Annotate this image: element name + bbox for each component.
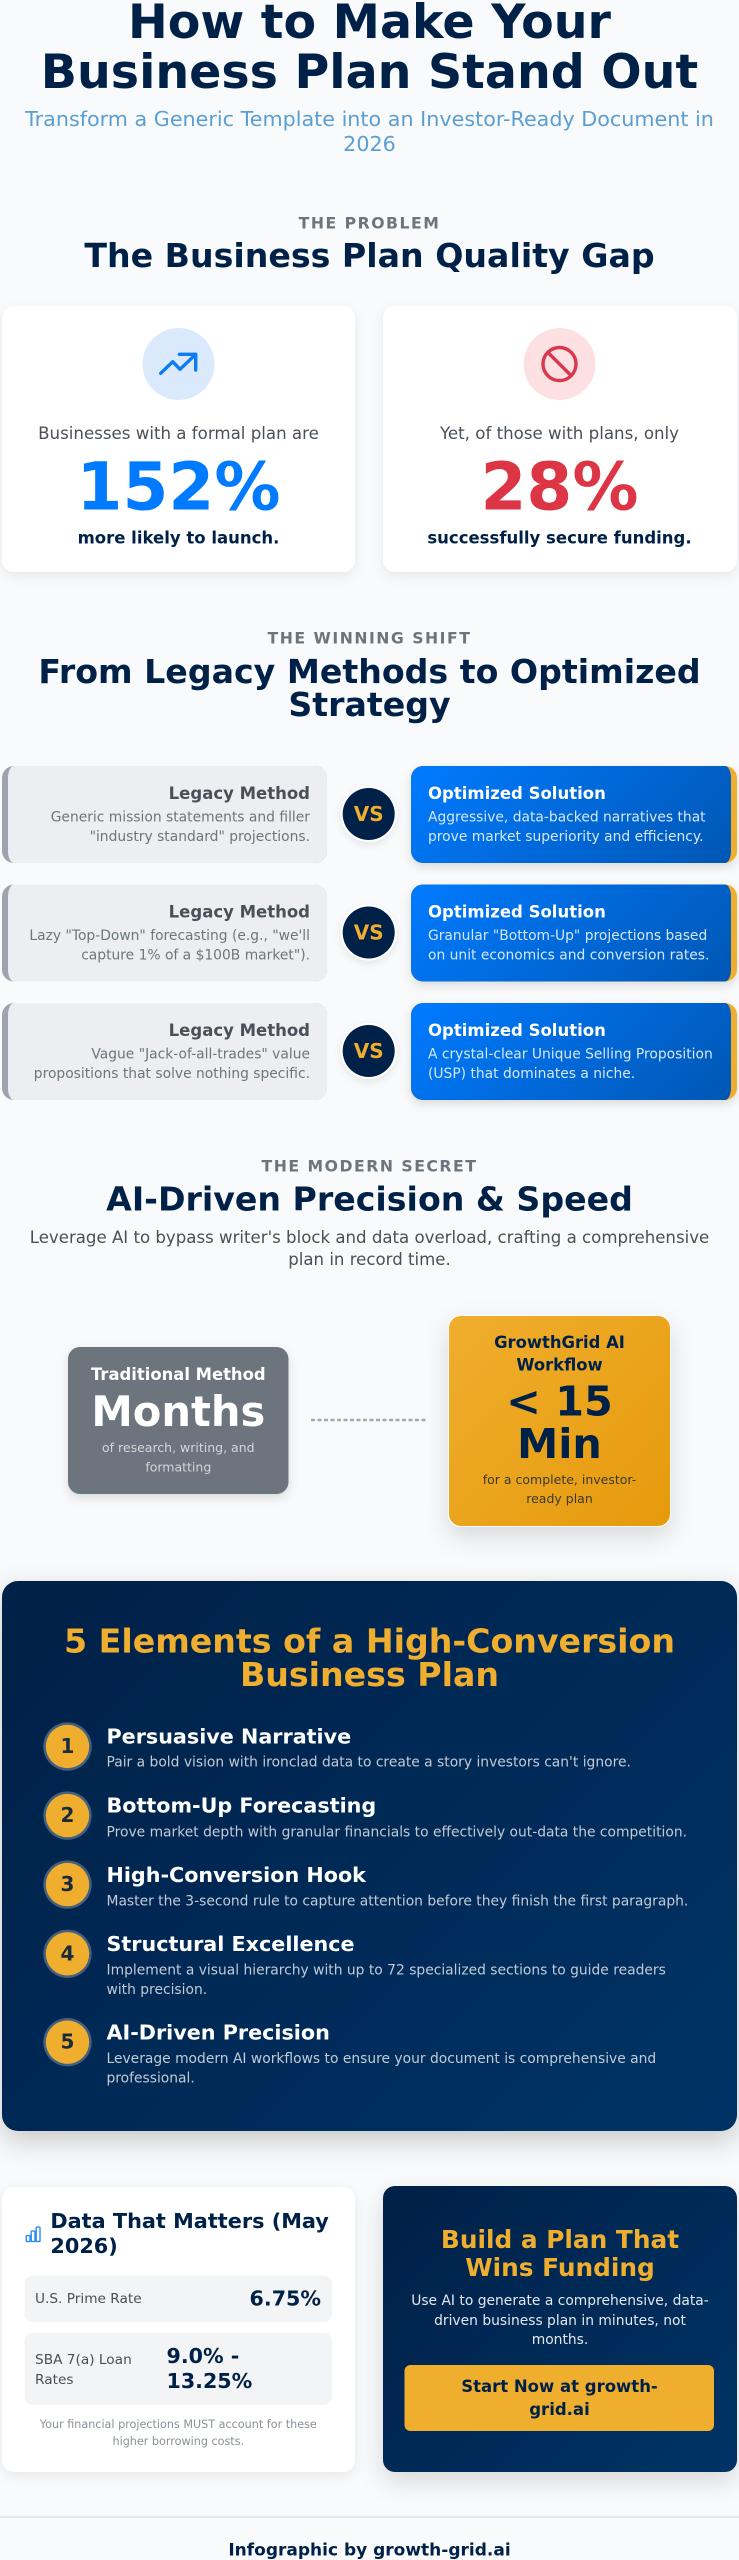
legacy card: Lazy "Top-Down" forecasting (e.g., "we'll: [29, 928, 310, 944]
vs badge: [341, 904, 397, 960]
panel: 5 elements: [2, 1581, 737, 2131]
vs badge: VS: [354, 920, 384, 944]
vs badge: [341, 1023, 397, 1079]
legacy card: Legacy Method: [169, 784, 310, 803]
panel: traditional method: Months: [91, 1387, 265, 1436]
vs badge: [341, 786, 397, 842]
element 3: High-Conversion Hook: [106, 1863, 367, 1887]
title line 2: Business Plan Stand Out: [41, 45, 698, 100]
stat number: 28%: [481, 448, 638, 526]
data row: sba rates: 9.0% -: [166, 2344, 239, 2368]
data row: sba rates: Rates: [35, 2372, 74, 2388]
cta button: Start Now at growth-: [461, 2377, 658, 2396]
data row: prime rate: 6.75%: [250, 2287, 321, 2311]
intro text: Leverage AI to bypass writer's block and data overload, crafting a comprehensive: [30, 1228, 709, 1247]
panel: traditional method: [68, 1347, 288, 1494]
element 2: Prove market depth with granular financials to effectively out-data the competition.: [106, 1824, 687, 1840]
section: the modern secret: [30, 1157, 709, 1527]
element 1: [43, 1722, 631, 1771]
footnote line 2: higher borrowing costs.: [113, 2435, 244, 2448]
data row: sba rates: 13.25%: [166, 2369, 252, 2393]
cta heading line 2: Wins Funding: [465, 2253, 655, 2282]
intro text line 2: plan in record time.: [288, 1250, 451, 1269]
legacy card: [2, 766, 327, 863]
element 5: AI-Driven Precision: [106, 2020, 330, 2044]
panel: traditional method: of research, writing, and: [102, 1440, 255, 1455]
header: title and subtitle: [24, 0, 714, 156]
section heading: From Legacy Methods to Optimized: [38, 652, 701, 691]
element 4: 4: [61, 1941, 74, 1965]
icon: trending up: [142, 328, 214, 400]
element 5: professional.: [106, 2070, 195, 2086]
data row: sba rates: [24, 2333, 332, 2405]
panel heading line 2: Business Plan: [240, 1655, 499, 1694]
element 4: Implement a visual hierarchy with up to 72 specialized sections to guide readers: [106, 1962, 666, 1978]
element 2: Bottom-Up Forecasting: [106, 1794, 376, 1818]
data row: sba rates: SBA 7(a) Loan: [35, 2352, 132, 2368]
element 1: 1: [61, 1734, 74, 1758]
icon: ban: [524, 328, 596, 400]
cta heading: Build a Plan That: [441, 2225, 679, 2254]
arrow: dashed connector: [311, 1419, 428, 1421]
panel: traditional method: formatting: [145, 1460, 211, 1475]
element 3: Master the 3-second rule to capture attention before they finish the first paragraph.: [106, 1894, 688, 1910]
section heading line 2: Strategy: [288, 685, 451, 724]
legacy card: capture 1% of a $100B market").: [81, 948, 310, 964]
cta text line 2: driven business plan in minutes, not: [434, 2313, 686, 2329]
section: the problem: [2, 214, 737, 572]
cta text line 3: months.: [532, 2332, 588, 2348]
element 4: [43, 1930, 666, 1998]
element 5: 5: [61, 2030, 74, 2054]
data row: prime rate: U.S. Prime Rate: [35, 2291, 142, 2307]
panel: growthgrid workflow: < 15: [506, 1378, 613, 1426]
optimized card: Optimized Solution: [428, 784, 606, 803]
legacy card: [2, 1003, 327, 1100]
vs badge: VS: [354, 802, 384, 826]
cta text: Use AI to generate a comprehensive, data-: [411, 2293, 709, 2309]
comparison row 3: [2, 1003, 737, 1100]
optimized card: Granular "Bottom-Up" projections based: [428, 928, 707, 944]
legacy card: [2, 884, 327, 982]
stat caption: more likely to launch.: [78, 528, 279, 548]
vs badge: VS: [354, 1039, 384, 1063]
legacy card: "industry standard" projections.: [90, 829, 310, 845]
stat lead-in: Yet, of those with plans, only: [439, 424, 679, 443]
legacy card: Legacy Method: [169, 1021, 310, 1040]
element 4: with precision.: [106, 1982, 207, 1998]
card heading: Data That Matters (May: [50, 2209, 329, 2233]
stat caption: successfully secure funding.: [427, 528, 692, 548]
eyebrow: THE WINNING SHIFT: [268, 628, 471, 648]
section heading: The Business Plan Quality Gap: [84, 236, 655, 275]
optimized card: on unit economics and conversion rates.: [428, 948, 709, 964]
element 1: Persuasive Narrative: [106, 1725, 351, 1749]
legacy card: Legacy Method: [169, 902, 310, 922]
subtitle: Transform a Generic Template into an Investor-Ready Document in: [24, 107, 714, 131]
optimized card: prove market superiority and efficiency.: [428, 829, 703, 845]
panel: call to action: [383, 2186, 737, 2472]
element 5: [43, 2018, 656, 2086]
legacy card: Generic mission statements and filler: [51, 809, 310, 825]
data row: prime rate: [24, 2276, 332, 2322]
panel: growthgrid workflow: Min: [517, 1420, 602, 1468]
comparison row 1: [2, 766, 737, 863]
panel: data that matters: [2, 2187, 355, 2472]
optimized card: [411, 1003, 737, 1100]
optimized card: [411, 884, 737, 982]
panel: growthgrid workflow: [448, 1315, 671, 1527]
legacy card: Vague "Jack-of-all-trades" value: [91, 1046, 310, 1062]
panel: growthgrid workflow: Workflow: [516, 1356, 603, 1375]
comparison row 2: [2, 884, 737, 982]
element 1: Pair a bold vision with ironclad data to create a story investors can't ignore.: [106, 1755, 631, 1771]
section: the winning shift: [2, 628, 737, 1100]
optimized card: Optimized Solution: [428, 1021, 606, 1040]
panel: stat card 152%: [2, 306, 355, 572]
optimized card: (USP) that dominates a niche.: [428, 1066, 635, 1082]
cta button: grid.ai: [529, 2400, 590, 2419]
element 5: Leverage modern AI workflows to ensure your document is comprehensive and: [106, 2051, 656, 2067]
panel: traditional method: Traditional Method: [91, 1365, 266, 1384]
panel: stat card 28%: [383, 306, 737, 572]
panel: growthgrid workflow: GrowthGrid AI: [494, 1333, 625, 1352]
card heading line 2: 2026): [50, 2234, 118, 2258]
optimized card: Aggressive, data-backed narratives that: [428, 809, 706, 825]
footnote: Your financial projections MUST account for these: [39, 2418, 317, 2431]
optimized card: [411, 766, 737, 863]
legacy card: propositions that solve nothing specific.: [34, 1066, 310, 1082]
panel: growthgrid workflow: ready plan: [526, 1491, 593, 1506]
element 4: Structural Excellence: [106, 1932, 355, 1956]
eyebrow: THE PROBLEM: [299, 214, 440, 232]
element 3: 3: [61, 1872, 74, 1896]
section heading: AI-Driven Precision & Speed: [106, 1180, 633, 1219]
eyebrow: THE MODERN SECRET: [262, 1157, 477, 1176]
optimized card: Optimized Solution: [428, 902, 606, 922]
stat lead-in: Businesses with a formal plan are: [38, 424, 319, 443]
panel: growthgrid workflow: for a complete, investor-: [483, 1472, 636, 1487]
element 2: [43, 1791, 687, 1840]
icon: bar chart: [26, 2227, 40, 2242]
panel heading: 5 Elements of a High-Conversion: [64, 1622, 675, 1661]
element 3: [43, 1860, 688, 1910]
element 2: 2: [61, 1803, 74, 1827]
subtitle line 2: 2026: [343, 132, 396, 156]
stat number: 152%: [77, 448, 280, 526]
cta button: [404, 2365, 714, 2431]
optimized card: A crystal-clear Unique Selling Proposition: [428, 1046, 713, 1062]
